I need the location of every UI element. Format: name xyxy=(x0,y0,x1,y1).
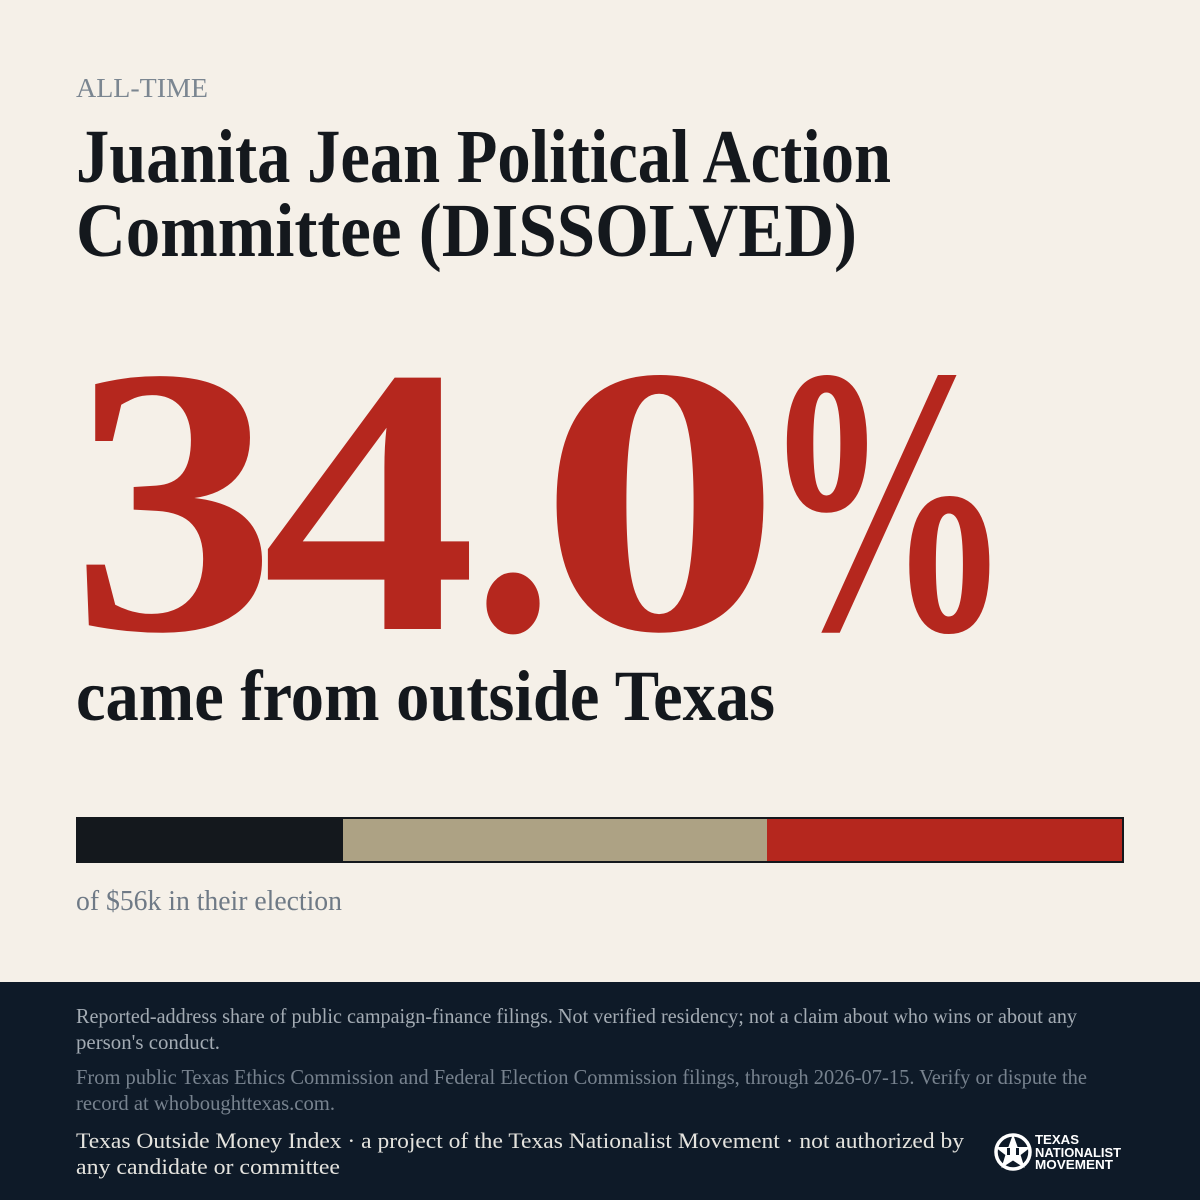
disclaimer text: Reported-address share of public campaign-finance filings. Not verified residency; not a claim about who wins or about any xyxy=(76,1004,1077,1028)
logo wordmark: TEXAS xyxy=(1035,1132,1079,1147)
source text: record at whoboughttexas.com. xyxy=(76,1091,335,1115)
title: Juanita Jean Political Action xyxy=(76,115,891,199)
big number: 34.0%: . xyxy=(472,289,554,712)
big number: 34.0%: % xyxy=(761,289,1013,712)
disclaimer text xyxy=(76,1004,1077,1054)
footer panel xyxy=(0,982,1200,1200)
big number: 34.0%: 0 xyxy=(538,289,782,712)
source text: From public Texas Ethics Commission and Federal Election Commission filings, through 2026-07-15. Verify or dispute the xyxy=(76,1065,1087,1089)
logo wordmark: MOVEMENT xyxy=(1035,1157,1113,1172)
bar caption: of $56k in their election xyxy=(76,886,342,917)
subheading: came from outside Texas: came from outside Texas xyxy=(76,656,775,736)
big number: 34.0%: 3 xyxy=(71,289,276,712)
logo: Texas Nationalist Movement xyxy=(995,1132,1121,1172)
attribution text: any candidate or committee xyxy=(76,1154,340,1179)
source text xyxy=(76,1065,1087,1115)
title: Committee (DISSOLVED) xyxy=(76,189,857,273)
logo wordmark xyxy=(1035,1132,1121,1172)
eyebrow: ALL-TIME: ALL-TIME xyxy=(76,73,208,103)
attribution text: Texas Outside Money Index · a project of the Texas Nationalist Movement · not authorized by xyxy=(76,1128,964,1153)
stacked bar xyxy=(76,817,1124,863)
disclaimer text: person's conduct. xyxy=(76,1030,220,1054)
big number: 34.0% xyxy=(71,289,1013,712)
logo wordmark: NATIONALIST xyxy=(1035,1145,1121,1160)
title xyxy=(76,115,891,273)
attribution text xyxy=(76,1128,964,1179)
big number: 34.0%: 4 xyxy=(262,289,477,712)
icon: star in circle xyxy=(995,1134,1031,1169)
